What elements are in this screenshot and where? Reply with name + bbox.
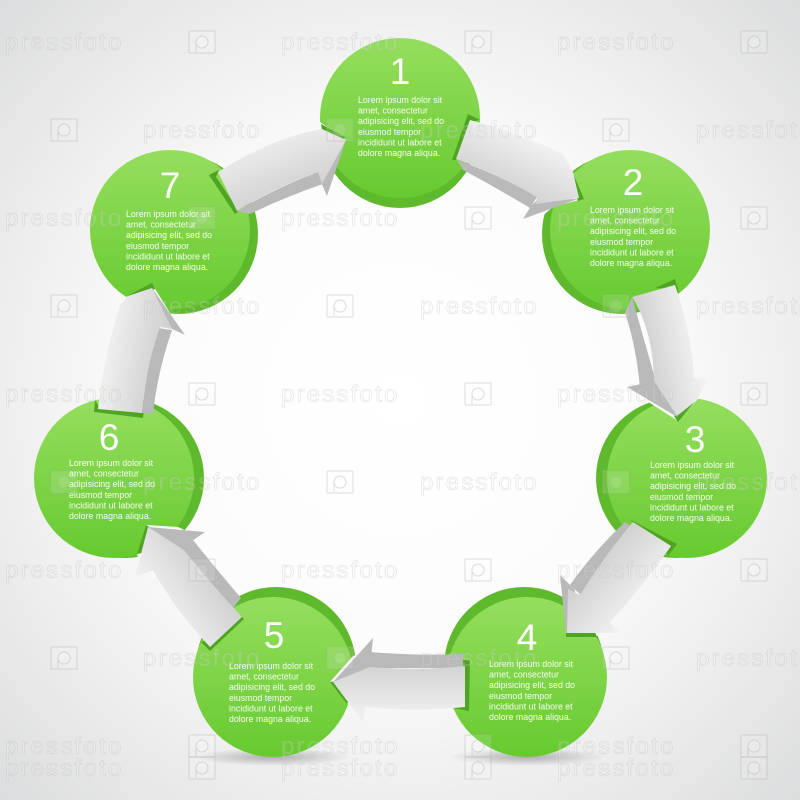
text block 2: adipisicing elit, sed do — [590, 226, 676, 236]
text block 3: Lorem ipsum dolor sit — [650, 460, 735, 470]
watermark grid: pressfoto — [143, 469, 262, 496]
watermark grid: pressfoto — [143, 645, 262, 672]
text block 1: adipisicing elit, sed do — [358, 116, 444, 126]
text block 3: adipisicing elit, sed do — [650, 481, 736, 491]
watermark grid: pressfoto — [281, 29, 400, 56]
watermark grid: pressfoto — [143, 117, 262, 144]
number 7: 7 — [160, 165, 180, 206]
number 6: 6 — [99, 417, 119, 458]
circle 6 — [34, 398, 204, 558]
watermark grid: pressfoto — [5, 733, 124, 760]
text block 7: amet, consectetur — [126, 220, 196, 230]
watermark grid: pressfoto — [557, 755, 676, 782]
text block 4: Lorem ipsum dolor sit — [489, 659, 574, 669]
watermark grid: pressfoto — [281, 733, 400, 760]
notch edges — [94, 114, 697, 711]
number 3: 3 — [685, 419, 705, 460]
text block 7: dolore magna aliqua. — [126, 262, 208, 272]
text block 1: amet, consectetur — [358, 106, 428, 116]
watermark grid: pressfoto — [420, 645, 539, 672]
number 4: 4 — [517, 617, 537, 658]
watermark grid: pressfoto — [557, 381, 676, 408]
watermark grid: pressfoto — [281, 381, 400, 408]
watermark grid: pressfoto — [5, 755, 124, 782]
arrow 4 to 5 — [333, 638, 465, 722]
text block 5: adipisicing elit, sed do — [229, 682, 315, 692]
watermark grid: pressfoto — [281, 557, 400, 584]
text block 4: eiusmod tempor — [489, 691, 552, 701]
arrow 2 to 3 — [625, 285, 708, 417]
text block 1: dolore magna aliqua. — [358, 148, 440, 158]
watermark grid: pressfoto — [5, 205, 124, 232]
watermark grid: pressfoto — [557, 733, 676, 760]
text block 5: incididunt ut labore et — [229, 703, 313, 713]
text block 5: eiusmod tempor — [229, 693, 292, 703]
text block 6: incididunt ut labore et — [69, 500, 153, 510]
text block 2: eiusmod tempor — [590, 237, 653, 247]
text block 1: incididunt ut labore et — [358, 137, 442, 147]
text block 6: amet, consectetur — [69, 469, 139, 479]
arrow 5 to 6 — [135, 527, 242, 647]
arrow 6 to 7 — [98, 288, 185, 413]
circle 7 — [90, 150, 258, 314]
text block 4: dolore magna aliqua. — [489, 712, 571, 722]
watermark grid: pressfoto — [5, 29, 124, 56]
text block 3: dolore magna aliqua. — [650, 513, 732, 523]
watermark grid: pressfoto — [5, 557, 124, 584]
circle 4 — [444, 587, 607, 757]
watermark grid: pressfoto — [557, 205, 676, 232]
number 1: 1 — [390, 51, 410, 92]
text block 4: adipisicing elit, sed do — [489, 680, 575, 690]
text block 6: eiusmod tempor — [69, 490, 132, 500]
circle 5 — [193, 587, 356, 757]
shadow under circle 5 — [195, 748, 351, 766]
text block 3: eiusmod tempor — [650, 492, 713, 502]
watermark grid: pressfoto — [557, 557, 676, 584]
text block 3: incididunt ut labore et — [650, 502, 734, 512]
circle 3 — [596, 398, 767, 558]
text block 1: eiusmod tempor — [358, 127, 421, 137]
text block 1: Lorem ipsum dolor sit — [358, 95, 443, 105]
text block 5: dolore magna aliqua. — [229, 714, 311, 724]
watermark grid: pressfoto — [5, 381, 124, 408]
text block 5: Lorem ipsum dolor sit — [229, 661, 314, 671]
number 2: 2 — [623, 162, 643, 203]
text block 2: amet, consectetur — [590, 216, 660, 226]
text block 4: amet, consectetur — [489, 670, 559, 680]
circle 2 — [542, 150, 710, 314]
text block 4: incididunt ut labore et — [489, 701, 573, 711]
shadow under circle 4 — [449, 748, 605, 766]
watermark grid: pressfoto — [143, 293, 262, 320]
text block 7: Lorem ipsum dolor sit — [126, 209, 211, 219]
text block 5: amet, consectetur — [229, 672, 299, 682]
watermark grid: pressfoto — [281, 755, 400, 782]
arrow 3 to 4 — [560, 522, 671, 633]
text block 6: Lorem ipsum dolor sit — [69, 458, 154, 468]
text block 2: Lorem ipsum dolor sit — [590, 205, 675, 215]
text block 7: incididunt ut labore et — [126, 251, 210, 261]
text block 2: incididunt ut labore et — [590, 247, 674, 257]
watermark grid: pressfoto — [420, 117, 539, 144]
arrow 7 to 1 — [218, 129, 346, 214]
text block 3: amet, consectetur — [650, 471, 720, 481]
text block 7: eiusmod tempor — [126, 241, 189, 251]
circle 1 — [320, 38, 480, 208]
watermark grid: pressfoto — [420, 469, 539, 496]
text block 7: adipisicing elit, sed do — [126, 230, 212, 240]
watermark grid: pressfoto — [557, 29, 676, 56]
text block 2: dolore magna aliqua. — [590, 258, 672, 268]
arrow 1 to 2 — [456, 120, 579, 219]
text block 6: adipisicing elit, sed do — [69, 479, 155, 489]
watermark grid: pressfoto — [281, 205, 400, 232]
number 5: 5 — [264, 615, 284, 656]
text block 6: dolore magna aliqua. — [69, 511, 151, 521]
watermark grid: pressfoto — [420, 293, 539, 320]
